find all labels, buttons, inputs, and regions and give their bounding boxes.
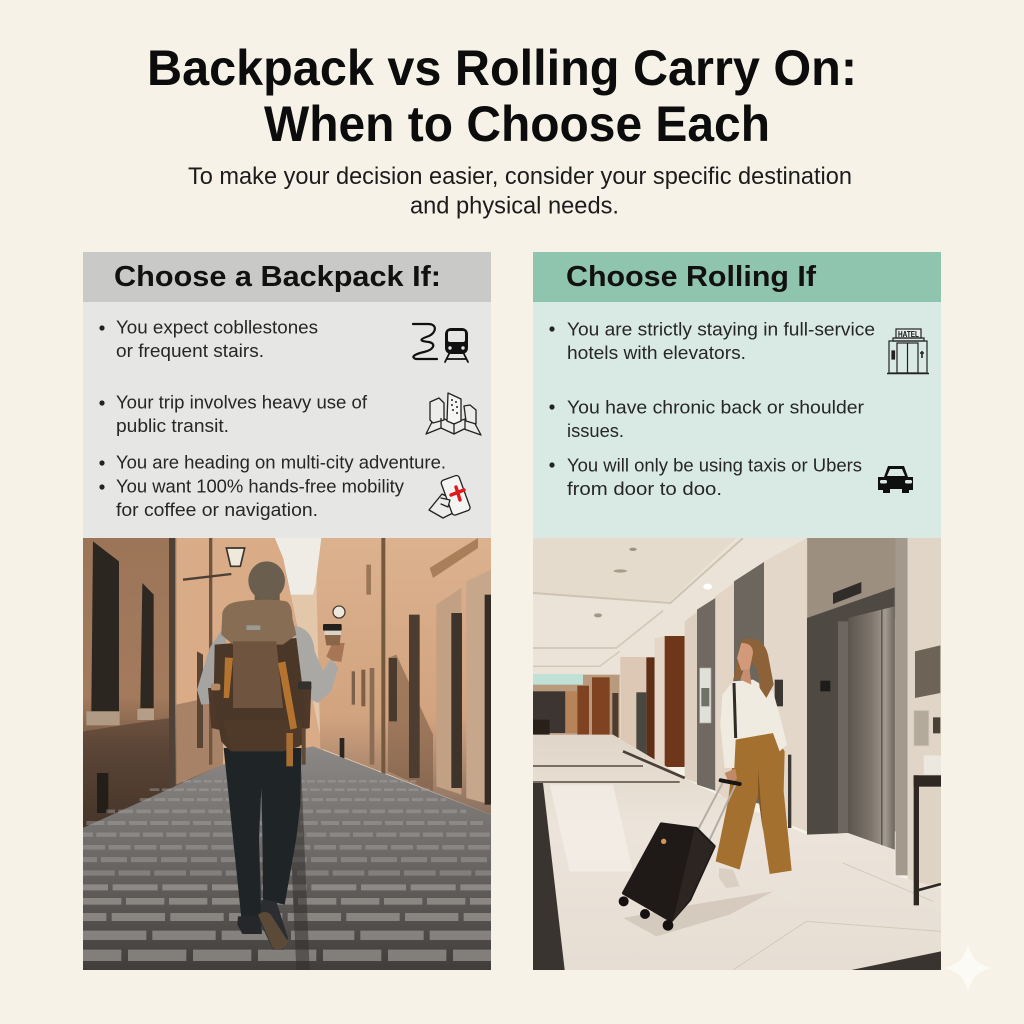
ceiling xyxy=(533,538,806,678)
hand xyxy=(725,769,737,785)
backpack xyxy=(208,688,220,730)
cobblestone ground xyxy=(83,746,491,970)
bullet: taxis or ubers: You will only be using taxis or Ubers xyxy=(567,456,862,476)
far corridor xyxy=(533,675,620,738)
console table xyxy=(914,755,941,905)
elevator bay xyxy=(807,538,907,875)
bullet: full-service hotels: hotels with elevators. xyxy=(567,343,746,363)
bullet: public transit: public transit. xyxy=(116,416,229,436)
suitcase handle xyxy=(698,780,736,840)
left buildings xyxy=(83,538,323,828)
wall lamp left xyxy=(226,548,245,566)
panel: choose a backpack xyxy=(83,252,491,970)
sleeves xyxy=(197,628,226,705)
heading: choose a backpack: Choose a Backpack If: xyxy=(114,261,441,293)
title: When to Choose Each xyxy=(264,96,770,152)
bullet: back or shoulder issues: issues. xyxy=(567,421,624,441)
icon: hotel elevator xyxy=(887,329,929,374)
bullet: back or shoulder issues: You have chronic back or shoulder xyxy=(567,398,864,418)
traveler xyxy=(197,561,345,950)
hair xyxy=(733,639,774,698)
bullet: full-service hotels: You are strictly staying in full-service xyxy=(567,320,875,340)
icon: sparkle watermark xyxy=(944,944,992,992)
panel body: rolling xyxy=(533,302,941,538)
head xyxy=(254,594,280,600)
shirt xyxy=(720,680,787,768)
heading: choose rolling: Choose Rolling If xyxy=(566,261,816,293)
legs xyxy=(224,748,301,918)
suitcase xyxy=(624,824,714,921)
panel: choose rolling xyxy=(533,252,941,970)
title: Backpack vs Rolling Carry On: xyxy=(147,40,857,96)
icon: car xyxy=(878,466,913,493)
photo: traveler with rolling suitcase in hotel corridor xyxy=(533,538,941,970)
bullet: cobblestones: You expect cobllestones xyxy=(116,318,318,338)
bullet: full-service hotels xyxy=(549,320,875,363)
right buildings xyxy=(316,538,491,815)
subtitle xyxy=(188,163,852,220)
subtitle: To make your decision easier, consider your specific destination xyxy=(188,163,852,190)
bullet: multi-city: You are heading on multi-city adventure. xyxy=(116,452,446,472)
title xyxy=(147,40,857,152)
hand and coffee xyxy=(326,643,345,662)
subtitle: and physical needs. xyxy=(410,192,619,220)
face xyxy=(737,643,753,671)
floor xyxy=(533,735,941,970)
bullet: back or shoulder issues xyxy=(549,398,864,441)
bullet: hands-free xyxy=(99,476,404,520)
photo: backpacker on a cobblestone street xyxy=(83,538,491,970)
shoes xyxy=(719,868,740,888)
traveler xyxy=(619,639,805,936)
right wall xyxy=(908,538,941,885)
heading: choose a backpack xyxy=(83,252,491,302)
icon: hotel elevator: HATEL xyxy=(898,330,919,339)
bullet: taxis or ubers: from door to doo. xyxy=(567,479,722,499)
sky and distant street xyxy=(210,538,380,772)
trousers xyxy=(716,733,792,874)
stanchion and wall art behind traveler xyxy=(788,755,791,828)
right lamp xyxy=(333,606,345,618)
icon: city map xyxy=(426,393,481,435)
bullet: hands-free: You want 100% hands-free mobility xyxy=(116,476,404,496)
icon: hand holding phone xyxy=(429,475,471,518)
panel body: backpack xyxy=(83,302,491,538)
bullet: cobblestones: or frequent stairs. xyxy=(116,341,264,361)
bullet: hands-free: for coffee or navigation. xyxy=(116,500,318,520)
icon: winding path and train xyxy=(413,324,468,362)
bullet: public transit: Your trip involves heavy use of xyxy=(116,392,368,412)
bullet: cobblestones xyxy=(99,318,318,361)
bullet: taxis or ubers xyxy=(549,456,862,499)
heading: choose rolling xyxy=(533,252,941,302)
bullet: public transit xyxy=(99,392,368,436)
